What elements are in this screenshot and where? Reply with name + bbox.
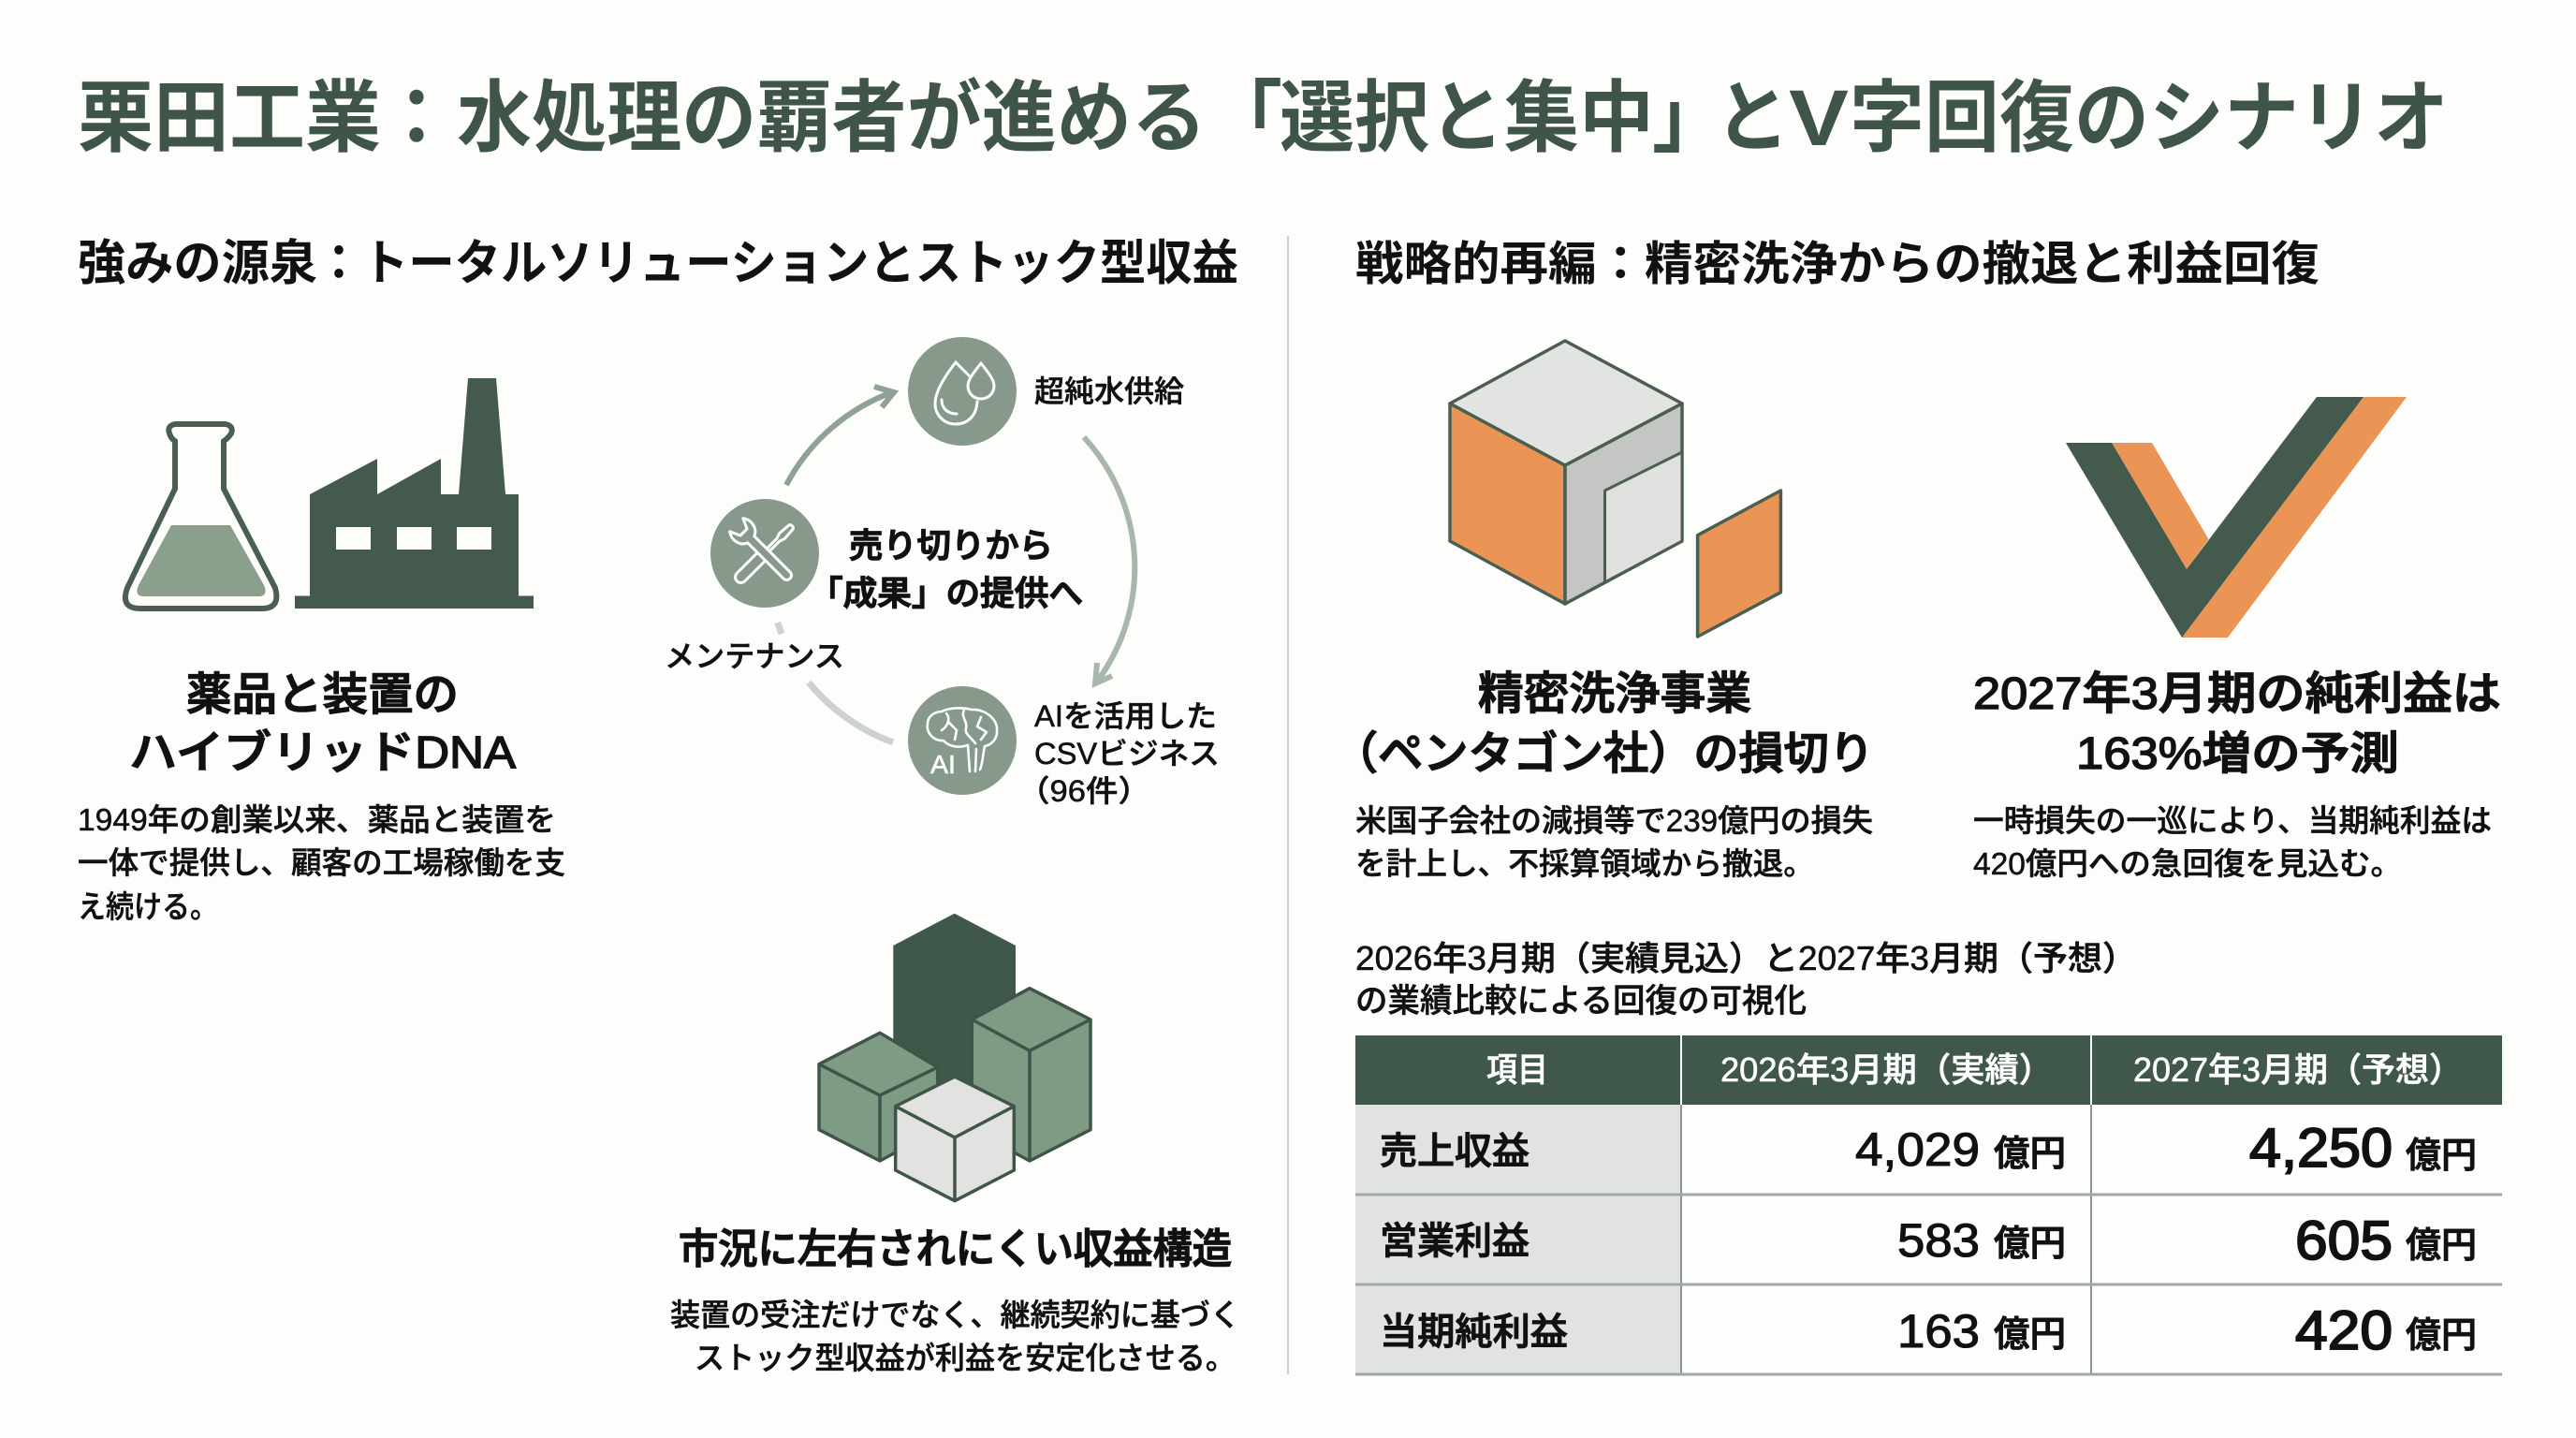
table row: net income: 億円	[2406, 1316, 2477, 1356]
text: stable revenue description: ストック型収益が利益を安定化させる。	[695, 1341, 1236, 1375]
icon: stacked blocks	[819, 914, 1090, 1201]
table row: net income	[1380, 1300, 2477, 1361]
icon: AI brain	[908, 686, 1017, 795]
heading: table caption: の業績比較による回復の可視化	[1355, 983, 1807, 1020]
text: stable revenue description	[670, 1298, 1240, 1375]
icon: cube with cut-out section	[1450, 341, 1682, 604]
heading: table caption	[1355, 939, 2137, 1020]
subheading: hybrid DNA: 薬品と装置の	[186, 670, 459, 720]
table row: revenue: 億円	[2406, 1137, 2477, 1176]
text: cycle centre message: 売り切りから	[849, 526, 1053, 565]
table row: net income: 420	[2295, 1300, 2393, 1361]
subheading: hybrid DNA	[129, 670, 516, 778]
icon: wrench and screwdriver	[710, 499, 819, 608]
table: earnings comparison	[1355, 1035, 2502, 1374]
heading: restructuring: 戦略的再編：精密洗浄からの撤退と利益回復	[1355, 238, 2320, 290]
title: 」	[1652, 74, 1727, 162]
subheading: precision cleaning exit: 精密洗浄事業	[1478, 669, 1751, 719]
heading: strengths: 強みの源泉	[78, 237, 317, 291]
icon: V-shaped recovery	[2066, 397, 2407, 638]
text: hybrid DNA description: 一体で提供し、顧客の工場稼働を支	[78, 845, 565, 880]
title: と	[1715, 74, 1790, 162]
subheading: stable revenue structure: 市況に左右されにくい収益構造	[679, 1226, 1232, 1272]
table row: operating profit: 億円	[2406, 1226, 2477, 1266]
title: V	[1789, 74, 1849, 162]
subheading: net profit forecast: 163%増の予測	[2076, 729, 2399, 779]
subheading: net profit forecast	[1973, 669, 2501, 779]
label: maintenance: メンテナンス	[665, 639, 844, 673]
title: ：	[379, 74, 454, 162]
icon: AI brain: AI	[930, 750, 956, 779]
table header row: 2027年3月期（予想）	[2133, 1050, 2463, 1089]
subheading: precision cleaning exit	[1333, 669, 1874, 779]
text: precision cleaning description	[1355, 803, 1873, 881]
table row: operating profit: 営業利益	[1380, 1221, 1530, 1262]
table row: operating profit: 583	[1897, 1214, 1980, 1267]
subheading: precision cleaning exit: （ペンタゴン社）の損切り	[1333, 729, 1874, 779]
subheading: hybrid DNA: ハイブリッドDNA	[129, 728, 516, 778]
table row: net income: 億円	[1994, 1315, 2066, 1355]
table row: revenue: 4,250	[2249, 1118, 2393, 1179]
text: net profit description: 420億円への急回復を見込む。	[1973, 846, 2402, 881]
table row: net income: 当期純利益	[1380, 1312, 1568, 1353]
text: net profit description	[1973, 803, 2492, 881]
text: hybrid DNA description: え続ける。	[78, 889, 218, 924]
heading: table caption: 2026年3月期（実績見込）と2027年3月期（予想）	[1355, 939, 2137, 977]
table header row: 項目	[1486, 1050, 1548, 1089]
title: 「	[1208, 74, 1282, 162]
text: cycle centre message	[809, 526, 1083, 612]
panel: strategic restructuring (right column)	[1333, 238, 2502, 1374]
icon: factory	[295, 378, 534, 609]
arrow: maintenance to ultrapure water	[786, 387, 894, 485]
table row: operating profit: 605	[2295, 1211, 2393, 1271]
title: 選択と集中	[1280, 74, 1654, 162]
icon: flask	[125, 424, 276, 609]
text: precision cleaning description: 米国子会社の減損等で239億円の損失	[1355, 803, 1873, 838]
text: cycle centre message: 「成果」の提供へ	[809, 574, 1083, 612]
table row: net income: 163	[1897, 1305, 1980, 1357]
arrow: ultrapure water to AI	[1084, 437, 1134, 683]
table row: operating profit	[1380, 1211, 2477, 1271]
title: 栗田工業	[78, 74, 381, 162]
title: 字回復のシナリオ	[1850, 74, 2449, 162]
icon: water drops	[908, 337, 1017, 446]
panel: strengths (left column)	[78, 237, 1240, 1375]
label: AI CSV business: CSVビジネス	[1034, 737, 1220, 770]
diagram: service cycle	[665, 337, 1220, 808]
text: precision cleaning description: を計上し、不採算領域から撤退。	[1355, 846, 1814, 881]
heading: strengths: ：	[315, 237, 362, 291]
label: AI CSV business	[1017, 699, 1220, 808]
text: net profit description: 一時損失の一巡により、当期純利益は	[1973, 803, 2492, 838]
title	[78, 74, 2449, 162]
icon: detached orange piece	[1698, 491, 1780, 637]
table header row	[1355, 1035, 2502, 1105]
table row: revenue: 売上収益	[1380, 1131, 1530, 1172]
label: AI CSV business: AIを活用した	[1034, 699, 1217, 733]
table row: revenue: 億円	[1994, 1135, 2066, 1174]
text: hybrid DNA description	[78, 802, 565, 924]
subheading: net profit forecast: 2027年3月期の純利益は	[1973, 669, 2501, 719]
label: ultrapure water supply: 超純水供給	[1034, 374, 1184, 408]
table header row: 2026年3月期（実績）	[1720, 1050, 2053, 1089]
label: AI CSV business: （96件）	[1017, 774, 1150, 808]
arrow: AI back to maintenance	[777, 623, 893, 742]
heading: strengths: トータルソリューションとストック型収益	[362, 237, 1238, 291]
table row: revenue	[1380, 1118, 2477, 1179]
text: stable revenue description: 装置の受注だけでなく、継続契約に基づく	[670, 1298, 1240, 1332]
table row: revenue: 4,029	[1855, 1123, 1980, 1176]
text: hybrid DNA description: 1949年の創業以来、薬品と装置を	[78, 802, 556, 837]
title: 水処理の覇者が進める	[457, 74, 1207, 162]
table row: operating profit: 億円	[1994, 1225, 2066, 1264]
